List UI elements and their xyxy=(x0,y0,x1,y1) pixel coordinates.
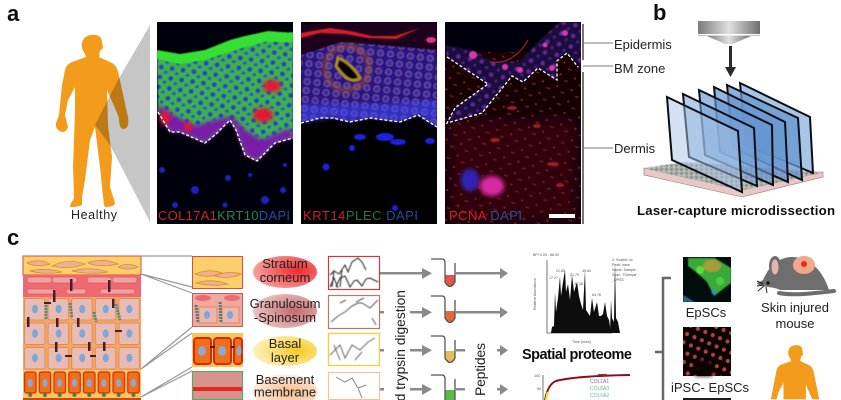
chart: mass spectrum: Relative Abundance xyxy=(533,278,537,310)
chart: cumulative protein curve: 100 xyxy=(534,374,540,378)
zoom box: basement membrane xyxy=(192,372,242,400)
icon: microscope objective xyxy=(698,21,760,44)
chart: mass spectrum: Peak: base xyxy=(612,263,630,267)
basal layer xyxy=(23,370,141,398)
chart: mass spectrum: 34.36 xyxy=(574,282,583,286)
dashed basement line xyxy=(158,112,293,161)
label: Skin injured mouse xyxy=(761,300,829,331)
icon: skin injured mouse xyxy=(757,256,834,294)
oval label: Basal layer: Basal xyxy=(269,336,301,351)
epidermis tissue layer xyxy=(157,32,293,161)
panel label a: a xyxy=(7,1,20,26)
red dermal haze xyxy=(450,120,576,220)
oval label: Basement membrane xyxy=(253,372,317,400)
tissue slab xyxy=(644,162,823,197)
red dermal streaks xyxy=(490,106,564,187)
bright nuclei band xyxy=(301,100,437,127)
chart: cumulative protein curve: COL6A3 xyxy=(590,386,609,392)
granular layer xyxy=(23,275,141,297)
red blobs xyxy=(160,80,281,132)
bracket xyxy=(655,278,671,400)
oval label: Basement membrane: membrane xyxy=(254,384,316,400)
scale bar xyxy=(549,214,575,218)
marker labels: COL17A1KRT10DAPI xyxy=(158,208,290,223)
zoom box: corneum xyxy=(192,256,242,288)
oval label: Stratum corneum xyxy=(253,256,317,288)
zoom projection triangle xyxy=(95,25,150,222)
label: Skin injured mouse: Skin injured xyxy=(761,300,829,315)
chart: mass spectrum: Time (mins) xyxy=(572,340,591,344)
oval label: Basal layer xyxy=(253,336,317,366)
epidermis tissue layer xyxy=(445,22,581,123)
purple basal zone xyxy=(158,105,293,161)
caption: Laser-capture microdissection: Laser-capture microdissection xyxy=(637,203,835,218)
panel: full skin schematic xyxy=(23,256,141,400)
panel label b: b xyxy=(653,0,666,25)
label: iPSC-EpSCs: iPSC- EpSCs xyxy=(671,380,750,395)
desmosome marks xyxy=(27,279,122,357)
chart: cumulative protein curve: 50 xyxy=(537,387,541,391)
chart: cumulative protein curve xyxy=(534,374,630,400)
panel label c: c xyxy=(7,225,19,250)
tube: orange xyxy=(431,296,455,322)
tube: yellow xyxy=(431,336,455,362)
chart: mass spectrum: BPI 0.00 - 88.00 xyxy=(533,253,559,257)
tube: red xyxy=(431,259,455,286)
magenta cluster xyxy=(461,169,504,196)
rotated label: Peptides: Peptides xyxy=(472,343,488,396)
dermis nuclei xyxy=(322,133,435,211)
magenta spot xyxy=(426,37,436,43)
label: Skin injured mouse: mouse xyxy=(775,316,815,331)
chart: mass spectrum: 49.64 xyxy=(582,269,591,273)
zoom box: granulosum spinosum xyxy=(192,294,242,326)
red stratum streak xyxy=(301,28,420,39)
chart: mass spectrum: 21.85 xyxy=(556,269,565,273)
oval label: Granulosum-Spinosum: Granulosum xyxy=(250,296,320,311)
panel: PCNA DAPI micrograph xyxy=(445,22,581,224)
arrow row: tubes to results xyxy=(456,268,508,395)
micrograph box: granulosum section xyxy=(328,296,380,328)
label: BM zone: BM zone xyxy=(614,61,665,76)
marker labels: KRT14PLEC DAPI xyxy=(303,208,418,223)
oval label: Granulosum-Spinosum xyxy=(250,294,320,328)
magenta nuclei xyxy=(469,30,568,73)
red curved stratum line xyxy=(490,40,528,63)
follicle ring xyxy=(325,46,369,90)
green stratum corneum band xyxy=(157,31,293,64)
tube: green xyxy=(431,375,455,400)
dashed basement line xyxy=(301,115,437,127)
chart: cumulative protein curve: COL1A1 xyxy=(590,379,609,385)
marker labels: PCNA DAPI xyxy=(449,208,522,223)
dermis nuclei xyxy=(159,163,287,208)
connector lines to zoom boxes xyxy=(141,256,192,397)
chart: mass spectrum: 64.76 xyxy=(592,293,601,297)
chart: mass spectrum: Scan: TSample xyxy=(612,273,637,277)
icon: human recipient xyxy=(771,345,819,399)
oval label: Stratum corneum: Stratum xyxy=(262,256,308,271)
follicle xyxy=(336,58,360,80)
label: Epidermis: Epidermis xyxy=(614,37,672,52)
micrograph box: basement section xyxy=(328,372,380,400)
arrow row: sections to tubes xyxy=(380,268,432,395)
dashed basement line xyxy=(447,53,578,123)
chart: mass spectrum: _UPSS xyxy=(611,278,624,282)
keratin bundles xyxy=(46,303,120,322)
oval label: Basement membrane: Basement xyxy=(256,372,315,387)
chart: mass spectrum: 17.27 xyxy=(549,276,558,280)
epidermis tissue layer xyxy=(301,42,437,127)
micrograph: EpSCs xyxy=(683,257,731,302)
micrograph: iPSC-EpSCs xyxy=(683,327,731,376)
label: Healthy: Healthy xyxy=(71,208,118,222)
heading: Spatial proteome: Spatial proteome xyxy=(522,347,632,363)
chart: mass spectrum: 2: Scaled: nc xyxy=(612,258,633,262)
oval label: Granulosum-Spinosum: -Spinosum xyxy=(254,310,316,325)
stratum corneum layer xyxy=(23,256,141,275)
chart: mass spectrum xyxy=(533,253,637,344)
chart: mass spectrum: 31.79 xyxy=(570,273,579,277)
chart: cumulative protein curve: COL6A2 xyxy=(590,393,609,399)
rotated label: trypsin digestion: d trypsin digestion xyxy=(393,290,408,400)
layer brackets and leader lines xyxy=(583,24,613,224)
chart: mass spectrum: Name: Sample xyxy=(612,268,636,272)
oval label: Stratum corneum: corneum xyxy=(260,270,310,285)
micrograph: next sample top edge xyxy=(683,398,731,400)
zoom box: basal xyxy=(192,333,243,367)
icon: healthy human figure xyxy=(56,35,128,207)
micrograph box: basal section xyxy=(328,334,380,366)
micrograph box: corneum section xyxy=(328,256,380,290)
arrow: laser down xyxy=(725,46,736,77)
capture slides stack xyxy=(667,83,813,192)
label: Dermis: Dermis xyxy=(614,141,656,156)
label: EpSCs: EpSCs xyxy=(686,305,727,320)
panel: KRT14 PLEC DAPI micrograph xyxy=(301,22,437,224)
panel: COL17A1 KRT10 DAPI micrograph xyxy=(157,22,293,224)
oval label: Basal layer: layer xyxy=(271,350,300,365)
spinous layer xyxy=(23,297,141,370)
